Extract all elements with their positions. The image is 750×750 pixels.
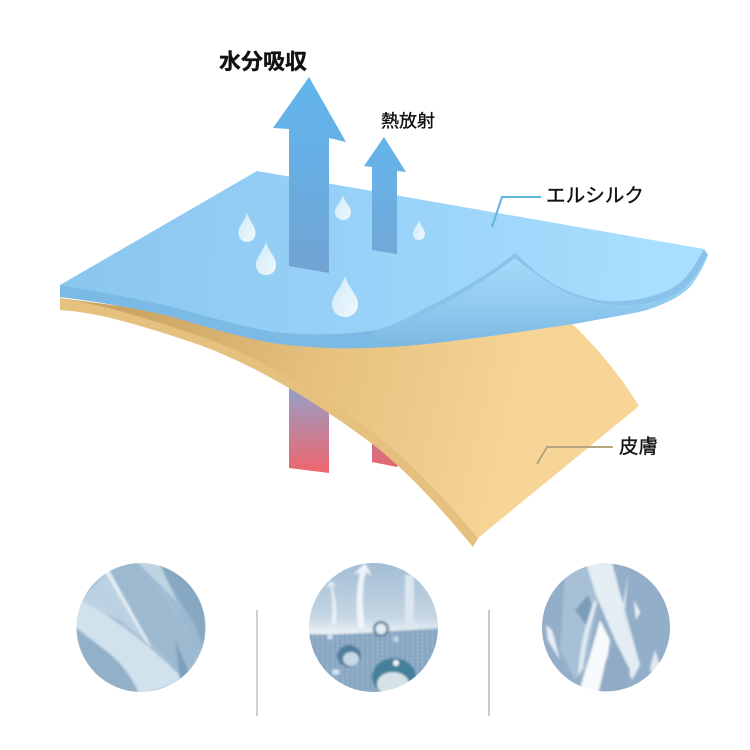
divider right — [488, 610, 490, 716]
leader line: silk — [492, 197, 541, 227]
silk curl edge — [404, 249, 708, 323]
silk left front edge — [60, 285, 377, 348]
skin layer — [60, 298, 639, 547]
silk layer — [60, 171, 708, 348]
label: silk: エルシルク — [546, 185, 644, 207]
small upward heat arrow — [364, 137, 406, 254]
heat bars below the skin — [289, 385, 400, 473]
silk layer top surface — [60, 171, 704, 334]
label: skin: 皮膚 — [619, 436, 658, 458]
photo circle: fibres — [76, 563, 206, 692]
photo circle: breathable mesh with droplets — [309, 563, 438, 692]
label: heat radiation: 熱放射 — [381, 111, 435, 131]
large upward moisture arrow — [273, 77, 346, 273]
water drops — [238, 195, 425, 317]
divider left — [256, 610, 258, 716]
silk layer thickness and underside — [60, 249, 708, 348]
skin layer edge strip — [60, 298, 478, 547]
leader line: skin — [537, 447, 613, 464]
photo circle: twisted fibres — [540, 560, 672, 695]
heading: moisture absorption: 水分吸収 — [219, 50, 307, 74]
